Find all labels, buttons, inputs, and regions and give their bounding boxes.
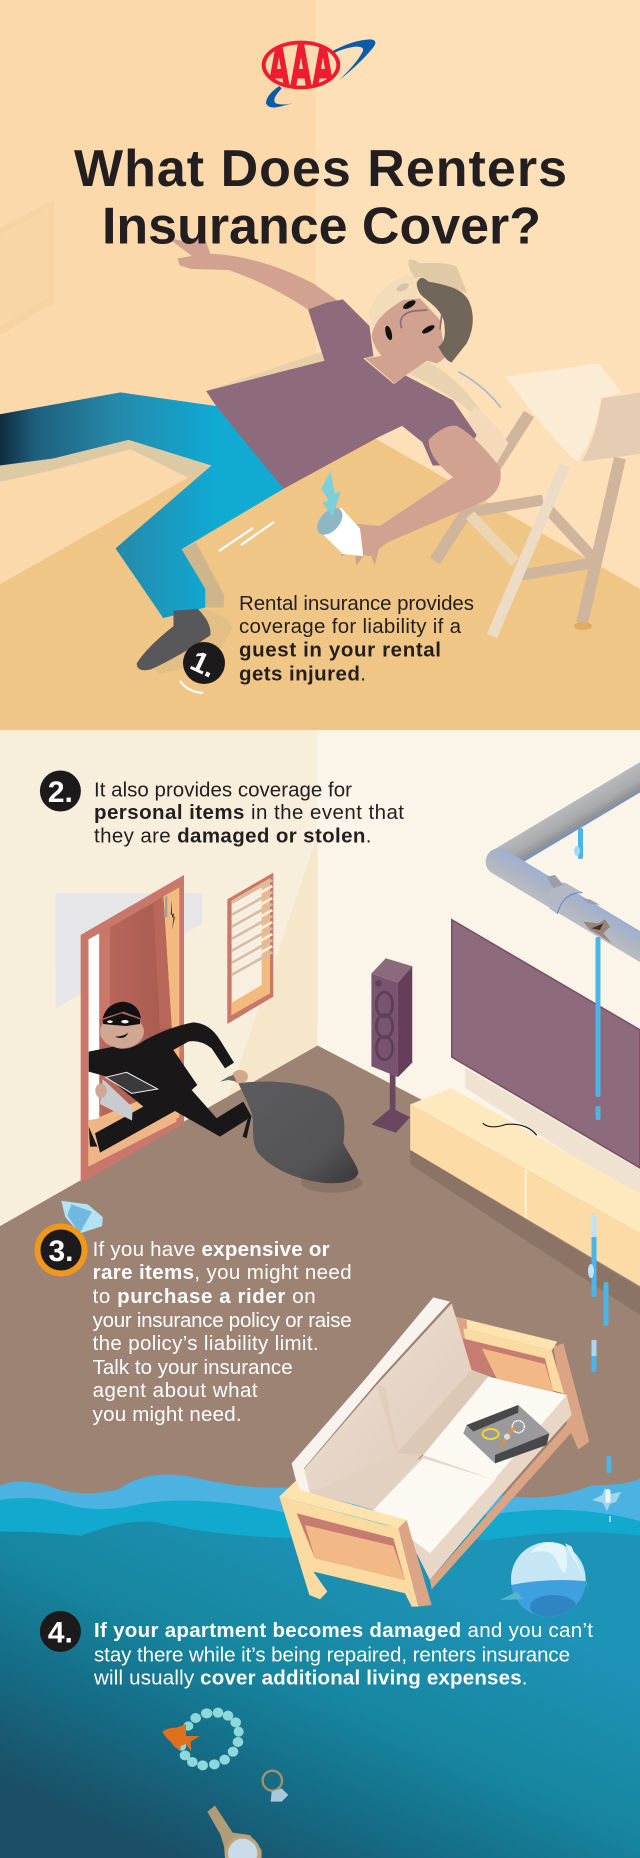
step 3 text: agent about what xyxy=(93,1379,258,1402)
title: What Does Renters xyxy=(74,140,567,198)
sofa xyxy=(279,1297,589,1607)
splash xyxy=(592,1488,621,1522)
backrest xyxy=(303,1303,490,1510)
jewellery box xyxy=(463,1405,549,1463)
window with blinds xyxy=(227,873,273,1024)
flood water xyxy=(0,1475,640,1858)
outside light patch xyxy=(56,893,202,1008)
step 3 badge with diamond ring xyxy=(38,1201,103,1274)
logo: AAA: AAA xyxy=(268,33,334,102)
tv and media console xyxy=(410,920,640,1315)
step 3 text: you might need. xyxy=(93,1403,242,1426)
water leak streams xyxy=(574,828,612,1473)
step 3 text: to purchase a rider on xyxy=(93,1285,316,1308)
step 1 text: guest in your rental xyxy=(239,638,441,661)
ring xyxy=(263,1771,288,1802)
lower arm and hand xyxy=(335,426,501,566)
step 3 text: Talk to your insurance xyxy=(93,1356,293,1379)
goldfish xyxy=(162,1724,200,1752)
step 2 badge: 2. xyxy=(48,776,73,809)
loot bag xyxy=(238,1081,358,1183)
panel: theft room background xyxy=(0,730,640,1301)
chair xyxy=(435,363,640,636)
step 3 text: If you have expensive or xyxy=(93,1238,330,1261)
step 3 text xyxy=(93,1238,352,1426)
console front xyxy=(410,1104,640,1286)
step 4 text xyxy=(93,1619,593,1689)
console top xyxy=(410,1088,640,1233)
icon: diamond ring xyxy=(61,1201,103,1233)
burglar xyxy=(89,1002,252,1153)
head, shoulders and arm back ghost xyxy=(368,260,508,463)
step 1 text: gets injured. xyxy=(239,663,366,686)
step 4 text: will usually cover additional living expenses. xyxy=(93,1666,528,1689)
shoe xyxy=(137,609,210,670)
step 4 text: stay there while it’s being repaired, renters insurance xyxy=(94,1644,570,1667)
step 1 text: coverage for liability if a xyxy=(239,615,462,638)
title xyxy=(74,140,567,256)
step 3 text: rare items, you might need xyxy=(93,1261,352,1284)
step 3 text: the policy’s liability limit. xyxy=(93,1332,319,1355)
door frame and door xyxy=(81,875,184,1183)
step 1 text xyxy=(239,592,474,686)
fishbowl xyxy=(500,1542,590,1623)
step 2 text: they are damaged or stolen. xyxy=(94,825,372,848)
step 4 badge: 4. xyxy=(48,1616,73,1650)
step 3 text: your insurance policy or raise xyxy=(93,1309,352,1332)
rear frame xyxy=(553,1343,589,1449)
motion lines xyxy=(180,522,274,693)
shirt xyxy=(206,299,477,489)
step 2 text: personal items in the event that xyxy=(94,801,404,824)
floor continuation xyxy=(0,1300,640,1600)
motion ghost shapes xyxy=(0,351,327,674)
wristwatch xyxy=(207,1806,262,1858)
step 4 badge xyxy=(40,1611,81,1652)
trouser legs xyxy=(0,392,284,618)
illustration: falling man xyxy=(0,230,640,693)
raised arm xyxy=(167,230,347,321)
step 1 text: Rental insurance provides xyxy=(239,592,474,615)
step 3 badge with diamond ring: 3. xyxy=(48,1235,74,1268)
step 2 text: It also provides coverage for xyxy=(94,778,352,802)
seat cushions xyxy=(373,1377,572,1580)
head xyxy=(365,278,501,408)
speaker xyxy=(371,958,412,1133)
front frame xyxy=(279,1480,407,1528)
pipe xyxy=(499,769,640,957)
icon: spilling cup xyxy=(313,471,363,556)
title: Insurance Cover? xyxy=(102,198,541,256)
step 4 text: If your apartment becomes damaged and you can’t xyxy=(94,1619,593,1642)
wall tv xyxy=(452,920,640,1168)
step 2 badge xyxy=(40,770,81,812)
underwater items xyxy=(162,1708,288,1858)
pearl necklace xyxy=(177,1708,244,1770)
step 2 text xyxy=(94,778,404,848)
step 1 badge: 1. xyxy=(185,645,221,684)
panel: liability background room xyxy=(0,0,640,731)
illustration: burglar at door with window xyxy=(56,873,362,1193)
bag shadow xyxy=(301,1173,362,1193)
